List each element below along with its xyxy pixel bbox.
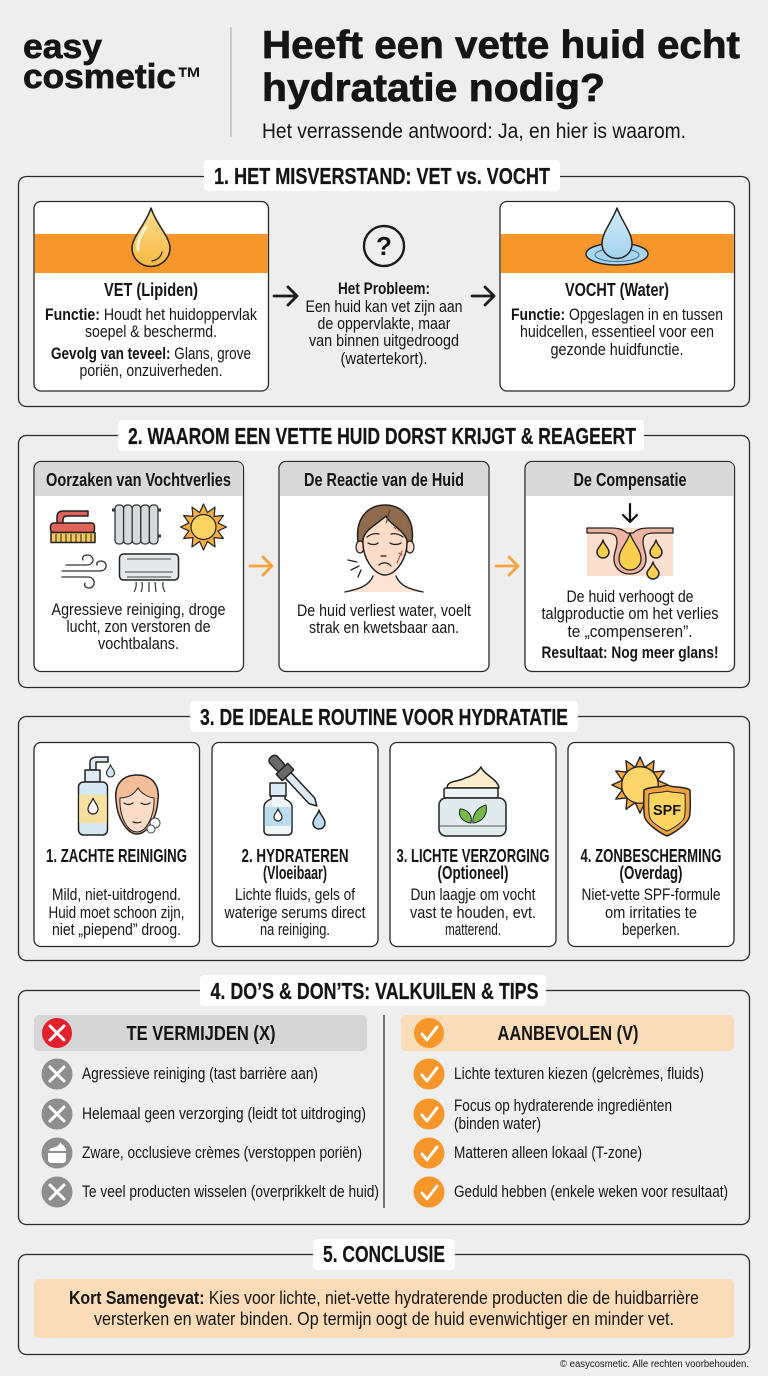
icon: oil drop <box>132 208 170 266</box>
heading: section 4 <box>200 975 546 1006</box>
card: oorzaken: vochtbalans. <box>98 634 179 653</box>
arrow <box>472 287 494 305</box>
card: oorzaken: Agressieve reiniging, droge <box>52 600 226 619</box>
callout: kort samengevat <box>34 1279 734 1338</box>
icon: water drop <box>586 243 648 265</box>
card: lichte verzorging: matterend. <box>445 920 501 939</box>
logo: easy cosmetic: easy <box>23 28 102 66</box>
logo: easy cosmetic: cosmetic <box>23 58 176 96</box>
card: compensatie: De Compensatie <box>574 470 686 490</box>
icon: irritated face <box>345 505 423 592</box>
card: vet: VET (Lipiden) <box>104 280 198 300</box>
header: te vermijden: TE VERMIJDEN (X) <box>126 1023 276 1045</box>
footer: copyright: © easycosmetic. Alle rechten voorbehouden. <box>560 1358 749 1370</box>
card: hydrateren: (Vloeibaar) <box>263 863 327 883</box>
icon: sun and spf shield <box>612 757 690 836</box>
title: Heeft een vette huid echt <box>262 24 740 67</box>
card: vocht: huidcellen, essentieel voor een <box>520 322 714 341</box>
text: het probleem <box>306 279 462 368</box>
text: het probleem: Een huid kan vet zijn aan <box>306 297 462 316</box>
header: aanbevolen: AANBEVOLEN (V) <box>498 1023 638 1045</box>
card: hydrateren <box>212 742 378 946</box>
icon: sun and spf shield: SPF <box>653 802 681 819</box>
arrow <box>274 287 297 305</box>
card: zachte reiniging: 1. ZACHTE REINIGING <box>46 846 187 866</box>
card: vet: Functie: Houdt het huidoppervlak <box>45 305 257 324</box>
card: vocht <box>500 202 734 391</box>
title <box>262 24 740 110</box>
text: het probleem: (watertekort). <box>340 349 428 368</box>
card: zachte reiniging: niet „piepend” droog. <box>52 920 181 939</box>
card: reactie: De huid verliest water, voelt <box>297 601 471 620</box>
arrow: orange <box>250 557 272 575</box>
heading: section 4: 4. DO’S & DON’TS: VALKUILEN & TIPS <box>210 978 538 1004</box>
icon: sun <box>180 504 226 550</box>
logo: easy cosmetic: ™ <box>177 62 202 95</box>
heading: section 2 <box>118 420 644 451</box>
panel: 4. do's and don'ts <box>18 975 750 1224</box>
card: reactie <box>279 462 489 672</box>
card: zonbescherming: Niet-vette SPF-formule <box>582 885 720 904</box>
list: aanbevolen: (binden water) <box>454 1114 541 1133</box>
card: reactie: strak en kwetsbaar aan. <box>309 618 459 637</box>
subtitle: Het verrassende antwoord: Ja, en hier is waarom. <box>262 120 686 143</box>
text: het probleem: Het Probleem: <box>338 279 430 298</box>
icon: cream jar <box>439 767 506 836</box>
icon: question mark <box>364 226 404 266</box>
card: hydrateren: na reiniging. <box>260 920 330 939</box>
list: te vermijden: Zware, occlusieve crèmes (verstoppen poriën) <box>82 1143 362 1162</box>
callout: kort samengevat: Kort Samengevat: Kies voor lichte, niet-vette hydraterende producten die de huidbarrière <box>69 1287 699 1308</box>
list: te vermijden: Helemaal geen verzorging (leidt tot uitdroging) <box>82 1104 366 1123</box>
card: lichte verzorging <box>390 742 556 946</box>
panel: 3. routine <box>18 701 750 960</box>
card: compensatie: De huid verhoogt de <box>566 587 694 606</box>
icon: question mark: ? <box>376 231 392 261</box>
card: oorzaken <box>34 462 244 672</box>
card: zonbescherming <box>568 742 734 946</box>
card: vocht: gezonde huidfunctie. <box>550 340 684 359</box>
logo: easy cosmetic <box>23 28 202 96</box>
card: vet: Gevolg van teveel: Glans, grove <box>51 344 251 363</box>
text: het probleem: de oppervlakte, maar <box>318 314 451 333</box>
panel: 1. het misverstand <box>18 160 750 406</box>
card: vet: poriën, onzuiverheden. <box>80 361 222 380</box>
card: compensatie: te „compenseren”. <box>568 622 692 641</box>
icon: radiator <box>112 505 161 544</box>
icon: sebaceous gland <box>587 504 673 580</box>
list: te vermijden: Te veel producten wisselen (overprikkelt de huid) <box>82 1182 379 1201</box>
card: zachte reiniging <box>34 742 200 946</box>
card: hydrateren: waterige serums direct <box>224 903 366 922</box>
list: aanbevolen <box>414 1058 728 1208</box>
list: aanbevolen: Matteren alleen lokaal (T-zone) <box>454 1143 642 1162</box>
card: reactie: De Reactie van de Huid <box>304 470 464 490</box>
icon: serum dropper <box>264 752 325 835</box>
card: hydrateren: Lichte fluids, gels of <box>235 885 355 904</box>
header: te vermijden <box>34 1015 367 1051</box>
card: vet <box>34 202 268 391</box>
panel: 2. waarom <box>18 420 750 688</box>
list: aanbevolen: Lichte texturen kiezen (gelcrèmes, fluids) <box>454 1064 704 1083</box>
heading: section 1: 1. HET MISVERSTAND: VET vs. VOCHT <box>214 163 550 189</box>
card: compensatie: talgproductie om het verlies <box>542 604 718 623</box>
text: het probleem: van binnen uitgedroogd <box>309 331 459 350</box>
card: zonbescherming: (Overdag) <box>620 863 682 883</box>
header: aanbevolen <box>401 1015 734 1051</box>
list: te vermijden <box>42 1058 379 1208</box>
list: te vermijden: Agressieve reiniging (tast barrière aan) <box>82 1064 318 1083</box>
card: vet: soepel & beschermd. <box>85 322 217 341</box>
card: compensatie <box>525 462 734 672</box>
card: zachte reiniging: Huid moet schoon zijn, <box>48 903 184 922</box>
heading: section 5: 5. CONCLUSIE <box>323 1241 445 1267</box>
icon: wind <box>62 555 106 588</box>
card: vocht: VOCHT (Water) <box>565 280 669 300</box>
title: hydratatie nodig? <box>262 67 605 110</box>
heading: section 3: 3. DE IDEALE ROUTINE VOOR HYDRATATIE <box>200 704 568 730</box>
icon: brush <box>50 511 95 542</box>
list: aanbevolen: Focus op hydraterende ingrediënten <box>454 1096 672 1115</box>
icon: cleanser and face <box>78 757 160 835</box>
heading: section 5 <box>313 1239 455 1270</box>
card: zonbescherming: beperken. <box>622 920 680 939</box>
icon: air conditioner <box>120 554 178 592</box>
card: compensatie: Resultaat: Nog meer glans! <box>542 643 718 662</box>
heading: section 3 <box>190 701 578 732</box>
card: zachte reiniging: Mild, niet-uitdrogend. <box>52 885 181 904</box>
card: vocht: Functie: Opgeslagen in en tussen <box>511 305 723 324</box>
card: oorzaken: Oorzaken van Vochtverlies <box>46 470 231 490</box>
card: lichte verzorging: 3. LICHTE VERZORGING <box>396 846 550 866</box>
card: lichte verzorging: Dun laagje om vocht <box>410 885 536 904</box>
card: lichte verzorging: vast te houden, evt. <box>410 903 536 922</box>
card: zonbescherming: om irritaties te <box>605 903 697 922</box>
heading: section 1 <box>204 160 560 191</box>
card: lichte verzorging: (Optioneel) <box>438 863 508 883</box>
card: hydrateren: 2. HYDRATEREN <box>242 846 348 866</box>
panel: 5. conclusie <box>18 1239 750 1354</box>
callout: kort samengevat: versterken en water binden. Op termijn oogt de huid evenwichtiger en minder vet. <box>94 1308 674 1329</box>
card: oorzaken: lucht, zon verstoren de <box>66 617 210 636</box>
arrow: orange <box>496 557 518 575</box>
card: zonbescherming: 4. ZONBESCHERMING <box>580 846 722 866</box>
